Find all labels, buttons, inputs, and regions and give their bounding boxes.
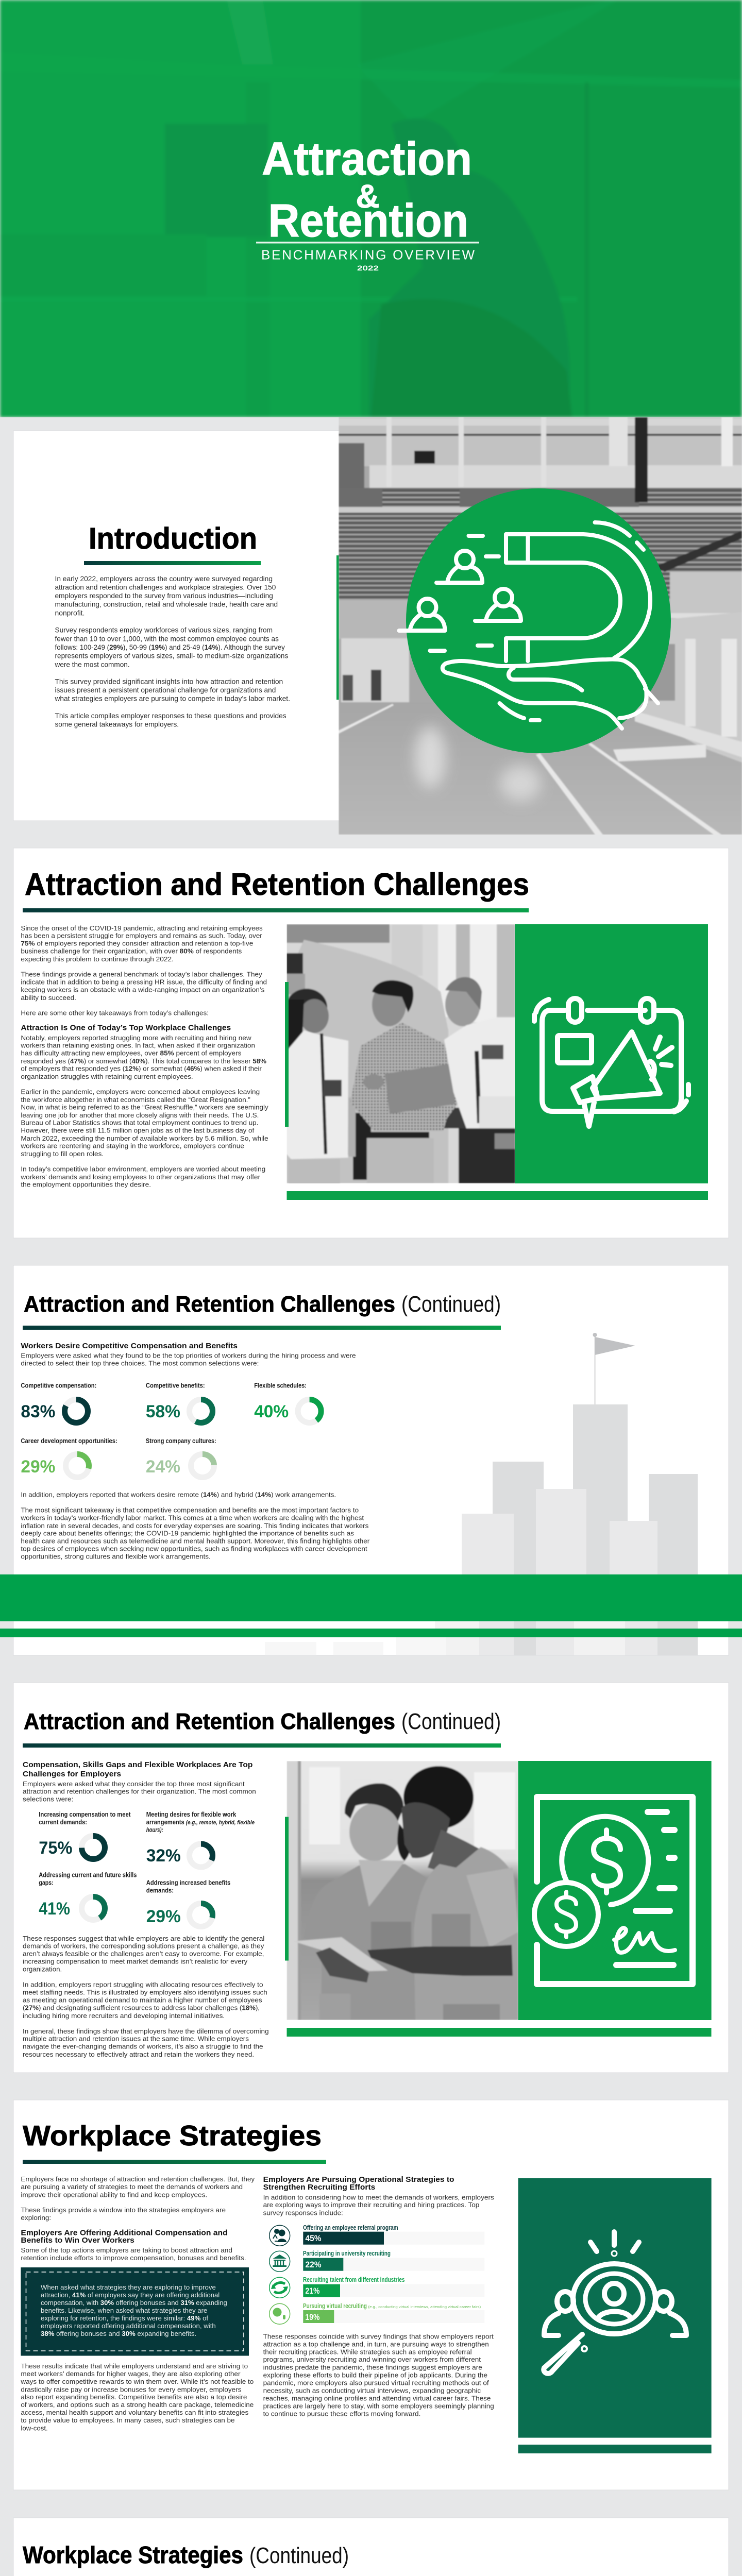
text: strategies intro column: Benefits to Win Over Workers	[21, 2236, 134, 2245]
callout: compensation findings: benefits. Likewise, when asked what strategies they are	[41, 2307, 207, 2314]
challenges body text: expecting this problem to continue through 2022.	[21, 955, 174, 963]
stat: flexible work desires 32%	[146, 1811, 255, 1867]
accent bar: side	[285, 982, 289, 1127]
intro body text: nonprofit.	[55, 608, 85, 617]
bar: virtual recruiting 19%: Pursuing virtual recruiting	[303, 2302, 367, 2310]
text: strategies intro column: These findings provide a window into the strategies employers are	[21, 2206, 226, 2214]
text: strategies intro column: exploring:	[21, 2214, 51, 2222]
icon: magnifier over people	[544, 2232, 686, 2374]
panel: challenges continued 1	[13, 1265, 729, 1655]
callout: compensation findings: compensation, with 30% offering bonuses and 31% expanding	[41, 2299, 227, 2307]
stat: competitive compensation 83%: 83%	[21, 1402, 55, 1421]
text: recruiting strategies intro: are exploring ways to improve their recruiting and hiring practices. Top	[263, 2201, 479, 2209]
intro body text: some general takeaways for employers.	[55, 720, 179, 728]
stat: flexible schedules 40%: Flexible schedules:	[254, 1382, 307, 1389]
text: takeaway on compensation: opportunities, strong cultures and flexible work arrangements.	[21, 1553, 211, 1560]
accent bar	[286, 1191, 708, 1200]
bar: employee referral program 45%: Offering an employee referral program	[303, 2224, 398, 2231]
bar: virtual recruiting 19%: 19%	[305, 2312, 319, 2322]
stat: flexible work desires 32%: Meeting desires for flexible work	[146, 1811, 236, 1818]
bar: different industries 21%	[269, 2276, 484, 2298]
bar: virtual recruiting 19%: (e.g., conducting virtual interviews, attending virtual career fairs)	[368, 2304, 481, 2309]
text: takeaway on compensation: top desires of employees when seeking new opportunities, such as finding workplaces with career development	[21, 1545, 367, 1553]
text: strategies intro column: retention include efforts to improve compensation, bonuses and benefits.	[21, 2254, 246, 2262]
challenges body text: of employers that responded yes ( 12%) or somewhat (46%) when asked if their	[21, 1065, 262, 1073]
bar: different industries 21%: 21%	[305, 2286, 319, 2296]
text: employer challenges discussion: navigate the ever-changing demands of workers, it’s also a struggle to find the	[23, 2042, 263, 2050]
intro body text: manufacturing, construction, retail and wholesale trade, health care and	[55, 600, 278, 608]
challenges body text: workers’ demands and losing employees to other organizations that may offer	[20, 1173, 261, 1181]
bar: different industries 21%: Recruiting talent from different industries	[303, 2276, 405, 2283]
text: compensation discussion: low-cost.	[21, 2424, 48, 2432]
panel: search icon block	[518, 2178, 712, 2438]
text: strategies intro column: are pursuing a variety of strategies to meet the demands of workers and	[21, 2183, 243, 2191]
stat: strong company cultures 24%	[146, 1437, 216, 1478]
text: recruiting strategies intro	[263, 2175, 494, 2216]
stat: strong company cultures 24%: Strong company cultures:	[146, 1437, 216, 1445]
heading: workplace strategies continued: (Continued)	[249, 2543, 349, 2568]
challenges body text: March 2022, exceeding the number of available workers by 5.6 million. So, while	[21, 1134, 268, 1142]
stat: career development 29%	[21, 1437, 117, 1478]
challenges body text: business challenge for their organization, with over 80% of respondents	[21, 947, 242, 955]
heading: challenges continued: (Continued)	[401, 1292, 501, 1317]
intro body text: fewer than 10 to over 1,000, with the most common employee counts as	[55, 634, 279, 642]
challenges body text: the workforce altogether in what economists called the “Great Resignation.”	[21, 1096, 250, 1104]
stat: flexible work desires 32%: 32%	[146, 1846, 181, 1866]
bar: university recruiting 22%	[269, 2250, 484, 2272]
intro body text: In early 2022, employers across the country were surveyed regarding	[55, 574, 273, 583]
text: employer challenges discussion: meet staffing needs. This is illustrated by employers also identifying issues such	[23, 1988, 267, 1996]
challenges body text: Earlier in the pandemic, employers were concerned about employees leaving	[21, 1088, 260, 1095]
hero title: Attraction	[262, 133, 472, 185]
accent bar: introduction	[336, 555, 339, 700]
challenges body text: responded yes (47%) or somewhat (40%). This total compares to the lesser 58%	[21, 1057, 266, 1065]
text: takeaway on compensation: deeply care about benefits offerings; the COVID-19 pandemic highlighted the importance of benefits such as	[21, 1530, 355, 1537]
stat: strong company cultures 24%: 24%	[146, 1457, 180, 1477]
text: strategies intro column: Some of the top actions employers are taking to boost attraction and	[21, 2246, 232, 2254]
hero year: 2022	[357, 264, 379, 272]
text: recruiting discussion	[263, 2332, 494, 2417]
arms and tablet	[367, 1945, 513, 1976]
panel: money icon block	[518, 1761, 712, 2020]
stat: increasing compensation 75%	[39, 1811, 131, 1859]
text: employer challenges discussion: as meeting an operational demand to maintain a higher number of employees	[23, 1996, 262, 2004]
stat: competitive benefits 58%: 58%	[146, 1402, 180, 1421]
challenges body text: ability to succeed.	[21, 994, 76, 1002]
text: strategies intro column: Employers Are Offering Additional Compensation and	[21, 2228, 228, 2237]
text: recruiting discussion: reaches, managing online profiles and attending virtual career fairs. These	[263, 2395, 491, 2402]
challenges body text: Attraction Is One of Today’s Top Workplace Challenges	[21, 1023, 231, 1032]
photo: two nurses with tablet	[286, 1761, 518, 2020]
stat: flexible schedules 40%	[254, 1382, 321, 1423]
text: employer challenges discussion: In general, these findings show that employers have the dilemma of overcoming	[23, 2027, 269, 2035]
callout: compensation findings: employers reported offering additional compensation, with	[41, 2322, 216, 2330]
intro body text: what strategies employers are pursuing to compete in today’s labor market.	[55, 694, 290, 703]
photo: factory floor	[339, 417, 742, 835]
text: takeaway on compensation: health care and resources such as telemedicine and mental health support. Moreover, this finding highlights other	[21, 1537, 370, 1545]
intro body text: follows: 100-249 (29%), 50-99 (19%) and 25-49 (14%). Although the survey	[55, 643, 285, 651]
photo: team with laptop	[286, 924, 515, 1185]
challenges body text: Since the onset of the COVID-19 pandemic, attracting and retaining employees	[21, 924, 263, 932]
hero subtitle: BENCHMARKING OVERVIEW	[261, 247, 475, 263]
callout: compensation findings	[21, 2267, 249, 2355]
woman	[289, 988, 328, 1008]
stat: increasing compensation 75%: 75%	[39, 1838, 72, 1858]
intro body text: employers responded to the survey from various industries—including	[55, 591, 273, 600]
text: recruiting discussion: their recruiting practices. While strategies such as employee referral	[263, 2348, 472, 2355]
text: recruiting discussion: industries predate the pandemic, these findings suggest employers are	[263, 2364, 482, 2371]
intro body text: were the most common.	[55, 660, 130, 668]
challenges body text: These findings provide a general benchmark of today’s labor challenges. They	[21, 970, 262, 978]
challenges body text: has been a persistent struggle for employers and remains as such. Today, over	[21, 931, 262, 939]
text: recruiting discussion: attraction as a top challenge and, in turn, are pursuing ways to strengthen	[263, 2341, 489, 2348]
bar: employee referral program 45%	[269, 2224, 484, 2246]
intro body text: issues present a persistent operational challenge for organizations and	[55, 686, 276, 694]
challenges body text: has difficulty attracting new employees, over 85% percent of employers	[21, 1049, 242, 1057]
stat: skills gaps 41%: 41%	[39, 1899, 70, 1919]
text: employer challenges discussion: demands of workers, the corresponding solutions present a challenge, as they	[23, 1942, 264, 1950]
stat: increasing compensation 75%: current demands:	[39, 1819, 87, 1826]
stat: skills gaps 41%	[39, 1871, 137, 1920]
text: recruiting discussion: pandemic, more employers also pursued virtual recruiting methods out of	[263, 2379, 489, 2387]
challenges body text: Now, in what is being referred to as the “Great Reshuffle,” workers are seemingly	[21, 1104, 268, 1111]
hero title: &	[356, 178, 379, 215]
text: takeaway on compensation	[20, 1491, 370, 1560]
stat: flexible work desires 32%: hours):	[146, 1826, 163, 1834]
right man	[444, 990, 480, 1027]
text: compensation discussion: to provide value to employees. In many cases, such strategies can be	[21, 2416, 235, 2424]
challenges body text: Here are some other key takeaways from today’s challenges:	[21, 1009, 209, 1016]
band: wide green stripe	[0, 1574, 742, 1621]
callout: compensation findings: 38% offering bonuses and 30% expanding benefits.	[41, 2330, 196, 2337]
challenges body text: In today’s competitive labor environment, employers are worried about meeting	[21, 1165, 265, 1173]
stat: career development 29%: 29%	[21, 1457, 55, 1477]
text: recruiting discussion: exploring these efforts to build their pipeline of job applicants. During the	[263, 2371, 487, 2379]
text: takeaway on compensation: In addition, employers reported that workers desire remote ( 14%) and hybrid (14%) work arrangements.	[21, 1491, 336, 1499]
text: compensation discussion: meet workers’ demands for higher wages, they are also exploring other	[21, 2370, 241, 2378]
heading: challenges continued: (Continued)	[401, 1709, 501, 1734]
stat: skills gaps 41%: gaps:	[39, 1879, 54, 1887]
accent bar	[518, 2445, 712, 2453]
text: employer challenges intro	[23, 1760, 256, 1803]
text: recruiting discussion: necessity, such as conducting virtual interviews, expanding geographic	[263, 2386, 481, 2394]
text: recruiting discussion: programs, university recruiting and winning over workers from different	[263, 2355, 481, 2363]
challenges body text: 75% of employers reported they consider attraction and retention a top-five	[21, 940, 253, 947]
hero title	[262, 133, 472, 247]
stat: benefits demands 29%: 29%	[146, 1907, 181, 1926]
text: employer challenges intro: Challenges for Employers	[23, 1770, 121, 1778]
heading: workplace strategies: Workplace Strategies	[23, 2120, 322, 2151]
text: worker priorities intro: directed to select their top three choices. The most common selections were:	[21, 1359, 259, 1367]
challenges body text: Notably, employers reported struggling more with recruiting and hiring new	[21, 1034, 251, 1042]
challenges body text: keeping workers is an obstacle with a wide-ranging impact on an organization’s	[21, 986, 265, 993]
text: compensation discussion: also report expanding benefits. Competitive benefits are also a top desire	[21, 2393, 247, 2401]
text: recruiting discussion: practices are largely here to stay, with some employers seemingly planning	[263, 2402, 494, 2410]
hero title: Retention	[268, 195, 468, 247]
icon: magnet attracting people	[399, 488, 671, 753]
bar: virtual recruiting 19%	[269, 2302, 484, 2324]
challenges body text: struggling to fill open roles.	[21, 1150, 104, 1158]
text: strategies intro column	[21, 2175, 255, 2262]
accent bar: side	[285, 1817, 289, 1961]
text: worker priorities intro	[21, 1342, 356, 1367]
stat: career development 29%: Career development opportunities:	[21, 1437, 117, 1445]
text: employer challenges discussion: aren’t always feasible or the challenges aren’t easy to overcome. For example,	[23, 1950, 264, 1957]
stat: benefits demands 29%: demands:	[146, 1887, 174, 1894]
text: takeaway on compensation: workers in today’s worker-friendly labor market. This comes at a time when workers are dealing with the highest	[20, 1514, 364, 1522]
stat: flexible work desires 32%: arrangements (e.g., remote, hybrid, flexible	[146, 1819, 255, 1826]
text: compensation discussion: of workers, and options such as a strong health care package, telemedicine	[21, 2401, 254, 2409]
text: employer challenges discussion: multiple attraction and retention issues at the same time. While employers	[23, 2035, 249, 2043]
stat: increasing compensation 75%: Increasing compensation to meet	[39, 1811, 131, 1818]
panel: workplace strategies	[13, 2100, 729, 2490]
panel: introduction	[13, 431, 341, 821]
text: employer challenges discussion: resources necessary to effectively attract and retain the workers they need.	[23, 2050, 254, 2058]
text: recruiting strategies intro: Strengthen Recruiting Efforts	[263, 2183, 375, 2192]
text: strategies intro column: Employers face no shortage of attraction and retention challenges. But, they	[21, 2175, 255, 2183]
callout: compensation findings: attraction, 41% of employers say they are offering additional	[41, 2291, 220, 2299]
text: strategies intro column: improve their operational ability to find and keep employees.	[21, 2191, 207, 2198]
stat: competitive benefits 58%	[146, 1382, 212, 1423]
stat: flexible schedules 40%: 40%	[254, 1402, 289, 1421]
callout: compensation findings: exploring for retention, the findings were similar: 49% of	[41, 2314, 208, 2322]
text: employer challenges intro: attraction and retention challenges for their organization. The most common	[23, 1788, 256, 1795]
text: employer challenges discussion: increasing compensation to meet market demands isn’t realistic for every	[23, 1958, 248, 1965]
hero banner	[0, 0, 742, 417]
text: employer challenges discussion: (27%) and designating sufficient resources to address labor challenges ( 18%),	[23, 2004, 260, 2011]
intro body text: This article compiles employer responses to these questions and provides	[55, 711, 286, 720]
panel: attraction and retention challenges	[13, 848, 729, 1238]
band: narrow green stripe	[0, 1629, 742, 1637]
text: compensation discussion: drastically raise pay or increase bonuses for every employer, employers	[21, 2385, 242, 2393]
accent bar	[286, 2028, 711, 2037]
text: compensation discussion: ways to offer competitive rewards to win them over. While it’s not feasible to	[20, 2378, 254, 2385]
challenges body text: the employment opportunities they desire.	[21, 1181, 151, 1189]
challenges body text: However, there were still 11.5 million open jobs as of the last business day of	[21, 1126, 255, 1134]
challenges body text	[20, 924, 268, 1189]
intro body text: Survey respondents employ workforces of various sizes, ranging from	[55, 625, 273, 634]
text: recruiting strategies intro: In addition to considering how to meet the demands of workers, employers	[263, 2193, 494, 2201]
intro body text	[55, 574, 290, 728]
centre man	[350, 1023, 459, 1131]
callout: compensation findings: When asked what strategies they are exploring to improve	[41, 2283, 216, 2291]
left nurse	[322, 1863, 423, 2020]
illustration: city skyline with flag	[265, 1333, 698, 1655]
text: recruiting discussion: to continue to pursue these efforts moving forward.	[263, 2410, 420, 2417]
challenges body text: leaving one job for another that more closely aligns with their needs. The U.S.	[21, 1111, 259, 1119]
heading: challenges continued: Attraction and Retention Challenges	[24, 1709, 395, 1734]
intro body text: This survey provided significant insights into how attraction and retention	[55, 677, 283, 685]
bar chart: recruiting strategies	[269, 2224, 484, 2324]
text: recruiting discussion: These responses coincide with survey findings that show employers report	[263, 2332, 494, 2340]
text: compensation discussion: These results indicate that while employers understand and are striving to	[21, 2362, 248, 2370]
text: employer challenges discussion: organization.	[23, 1965, 62, 1973]
bar: university recruiting 22%: 22%	[305, 2260, 322, 2269]
text: worker priorities intro: Employers were asked what they found to be the top priorities of workers during the hiring process and were	[21, 1352, 356, 1360]
text: worker priorities intro: Workers Desire Competitive Compensation and Benefits	[21, 1342, 238, 1350]
text: recruiting strategies intro: survey responses include:	[263, 2209, 343, 2216]
text: employer challenges intro: Employers were asked what they consider the top three most significant	[23, 1780, 245, 1788]
text: compensation discussion	[20, 2362, 254, 2432]
text: recruiting strategies intro: Employers Are Pursuing Operational Strategies to	[263, 2175, 454, 2184]
challenges body text: workers than retaining existing ones. In fact, when asked if their organization	[20, 1042, 255, 1049]
heading: introduction: Introduction	[89, 522, 257, 555]
stat: benefits demands 29%	[146, 1879, 230, 1927]
challenges body text: indicate that in addition to being a pressing HR issue, the difficulty of finding and	[21, 978, 267, 986]
text: takeaway on compensation: inflation rate in several decades, and costs for everyday expenses are soaring. This finding indicates that workers	[21, 1522, 369, 1530]
stat: competitive benefits 58%: Competitive benefits:	[146, 1382, 205, 1389]
text: employer challenges discussion	[23, 1935, 269, 2058]
text: employer challenges intro: Compensation, Skills Gaps and Flexible Workplaces Are Top	[23, 1760, 252, 1769]
panel: challenges continued 2	[13, 1683, 729, 2073]
challenges body text: workers are reentering and staying in the workforce, employers continue	[20, 1142, 244, 1150]
panel: calendar icon block	[515, 924, 708, 1183]
heading: workplace strategies continued: Workplace Strategies	[23, 2541, 243, 2568]
panel: workplace strategies continued	[13, 2518, 729, 2576]
stat: competitive compensation 83%: Competitive compensation:	[21, 1382, 96, 1389]
icon: calendar and megaphone	[534, 998, 688, 1126]
stat: competitive compensation 83%	[21, 1382, 96, 1423]
stat: benefits demands 29%: Addressing increased benefits	[146, 1879, 230, 1887]
text: employer challenges discussion: In addition, employers report struggling with allocating resources effectively to	[23, 1981, 263, 1989]
text: employer challenges discussion: These responses suggest that while employers are able to identify the general	[23, 1935, 264, 1942]
text: employer challenges intro: selections were:	[23, 1795, 73, 1803]
challenges body text: organization struggles with retaining current employees.	[21, 1073, 193, 1080]
bar: employee referral program 45%: 45%	[305, 2233, 322, 2243]
text: takeaway on compensation: The most significant takeaway is that competitive compensation and benefits are the most important factors to	[21, 1506, 359, 1514]
heading: challenges continued: Attraction and Retention Challenges	[24, 1292, 395, 1317]
intro body text: represents employers of various sizes, small- to medium-size organizations	[55, 651, 288, 659]
right nurse	[403, 1766, 474, 1829]
icon: money and signature	[534, 1797, 693, 1984]
bar: university recruiting 22%: Participating in university recruiting	[303, 2250, 391, 2257]
stat: skills gaps 41%: Addressing current and future skills	[39, 1871, 137, 1878]
challenges body text: Bureau of Labor Statistics shows that total employment continues to trend up.	[21, 1119, 258, 1127]
text: compensation discussion: access, mental health support and voluntary benefits can fit into strategies	[21, 2409, 249, 2416]
intro body text: attraction and retention challenges and workplace strategies. Over 150	[55, 583, 276, 591]
heading: challenges: Attraction and Retention Challenges	[25, 867, 529, 902]
text: employer challenges discussion: including hiring more recruiters and developing internal initiatives.	[23, 2012, 225, 2020]
